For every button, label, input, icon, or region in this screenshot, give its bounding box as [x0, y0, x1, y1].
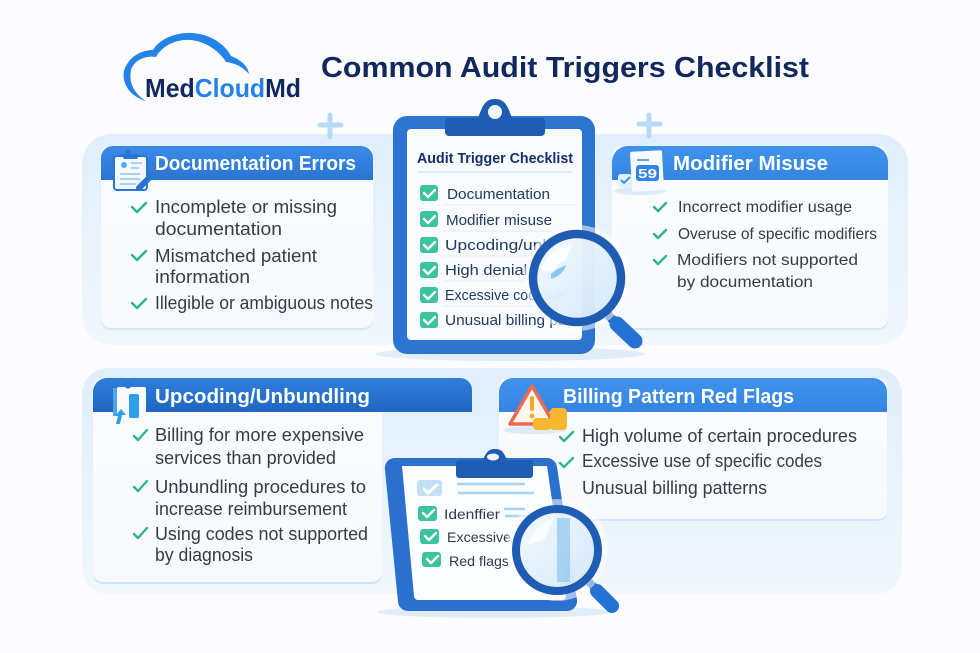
list: documentation	[155, 219, 282, 239]
list: Mismatched patient	[155, 246, 317, 266]
clipboard list	[418, 506, 530, 569]
plus decoration right	[639, 115, 660, 136]
heading: Documentation Errors	[155, 153, 356, 175]
list: information	[155, 267, 250, 287]
logo: MedCloudMd	[124, 33, 301, 103]
clipboard top row	[417, 480, 534, 496]
clipboard list: Excessive	[447, 529, 511, 545]
clipboard list: High denial u	[445, 263, 541, 279]
icon: code 59 page	[614, 150, 666, 195]
panel: upcoding/unbundling	[93, 378, 472, 584]
heading: Billing Pattern Red Flags	[563, 386, 794, 408]
clipboard list: Red flags	[449, 553, 509, 569]
panel: documentation errors	[101, 146, 373, 330]
list: services than provided	[155, 448, 336, 468]
clipboard list: Documentation	[447, 187, 550, 203]
panel: modifier misuse	[612, 146, 888, 330]
list: Unbundling procedures to	[155, 477, 366, 497]
clipboard list: Excessive cod use	[445, 288, 563, 304]
list: Modifiers not supported	[677, 252, 858, 269]
list: Billing for more expensive	[155, 425, 364, 445]
clipboard clip	[456, 449, 533, 478]
illustration: lower clipboard	[377, 449, 613, 618]
list: Illegible or ambiguous notes	[155, 293, 373, 313]
list: High volume of certain procedures	[582, 426, 857, 446]
clipboard list: Upcoding/unb	[445, 238, 552, 254]
panel: billing pattern red flags	[499, 378, 887, 521]
clipboard list: Unusual billing patt	[445, 313, 575, 329]
icon: lower magnifying glass	[506, 499, 612, 606]
illustration: main clipboard	[375, 99, 645, 361]
list: by documentation	[677, 274, 813, 291]
heading: Upcoding/Unbundling	[155, 386, 370, 408]
heading: Modifier Misuse	[673, 153, 828, 175]
list	[582, 426, 857, 498]
list: Excessive use of specific codes	[582, 451, 822, 471]
icon: warning triangle with coins	[503, 386, 567, 434]
icon: clipboard with pencil	[114, 150, 151, 190]
bottom background band	[82, 368, 902, 594]
clipboard clip	[445, 99, 545, 136]
top background band	[82, 134, 908, 345]
clipboard list: Idenffier	[444, 506, 500, 522]
list: increase reimbursement	[155, 499, 347, 519]
list: Unusual billing patterns	[582, 478, 767, 498]
list: by diagnosis	[155, 545, 253, 565]
list	[654, 199, 877, 291]
title: Common Audit Triggers Checklist	[321, 52, 809, 84]
plus decoration left	[320, 115, 341, 137]
clipboard list	[420, 185, 578, 329]
list: Overuse of specific modifiers	[678, 226, 877, 243]
list: Incorrect modifier usage	[678, 199, 852, 216]
logo: MedCloudMd: MedCloudMd	[145, 73, 301, 103]
icon: clipboard with arrow	[113, 382, 146, 424]
check marks: billing list	[560, 432, 573, 467]
icon: main magnifying glass	[524, 225, 635, 341]
icon: code 59 page: 59	[638, 166, 657, 181]
clipboard list: Modifier misuse	[446, 213, 552, 229]
list	[134, 425, 368, 565]
list	[132, 197, 373, 313]
list: Using codes not supported	[155, 524, 368, 544]
list: Incomplete or missing	[155, 197, 337, 217]
clipboard heading: Audit Trigger Checklist	[417, 151, 573, 167]
